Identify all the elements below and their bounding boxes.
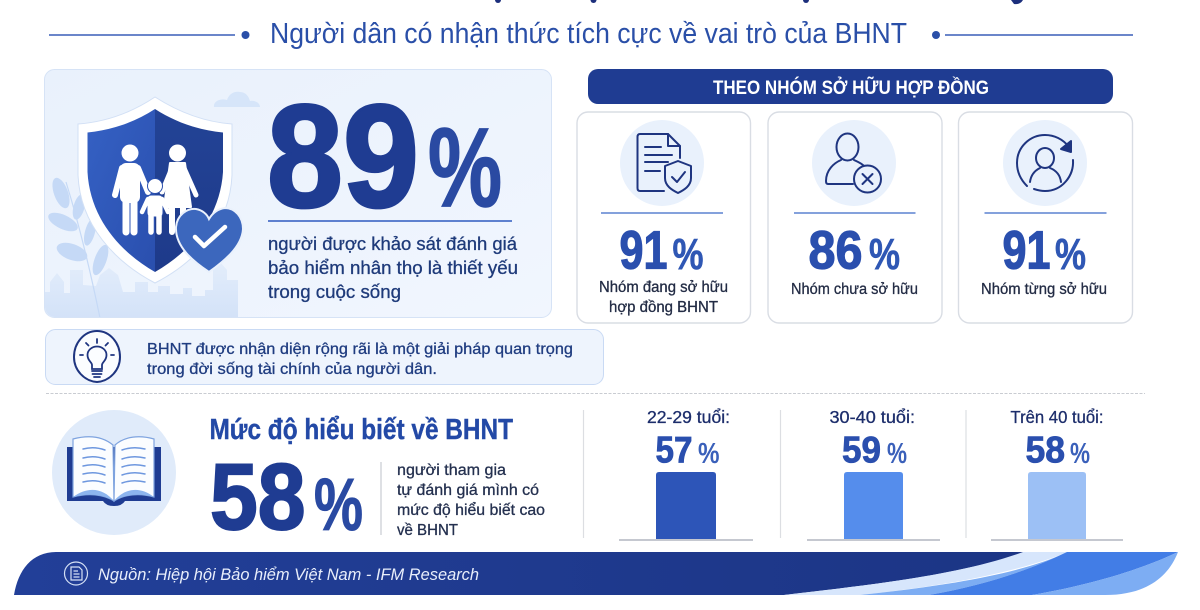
card: former owners: 91 bbox=[1002, 220, 1050, 280]
big number 89%: % bbox=[428, 105, 502, 230]
header pill: THEO NHÓM SỞ HỮU HỢP ĐỒNG bbox=[713, 75, 989, 99]
bar: over 40 bbox=[991, 407, 1123, 540]
description: bảo hiểm nhân thọ là thiết yếu bbox=[268, 258, 518, 278]
icon: source document bbox=[64, 562, 88, 585]
big number 89%: 89 bbox=[267, 74, 419, 238]
callout: BHNT: BHNT được nhận diện rộng rãi là một giải pháp quan trọng bbox=[147, 341, 573, 358]
bar: 22-29 bbox=[619, 407, 753, 540]
big number 58%: 58 bbox=[210, 444, 306, 549]
card: current owners: % bbox=[672, 230, 704, 279]
description bbox=[268, 234, 518, 302]
card: non-owners bbox=[768, 112, 942, 323]
clipped title descenders bbox=[495, 0, 1023, 4]
bar: 22-29: 57 bbox=[656, 430, 692, 470]
card: non-owners: % bbox=[869, 230, 900, 279]
bar: 30-40: 59 bbox=[842, 430, 881, 470]
card: former owners bbox=[958, 112, 1132, 323]
big number 89% bbox=[267, 74, 502, 238]
description: trong cuộc sống bbox=[268, 282, 401, 302]
city skyline bbox=[45, 262, 238, 318]
bar: over 40: % bbox=[1070, 438, 1090, 470]
card: current owners: Nhóm đang sở hữu bbox=[599, 279, 728, 296]
bar: 30-40: 30-40 tuổi: bbox=[830, 407, 915, 427]
big number 58% bbox=[210, 444, 363, 549]
heading: awareness: Mức độ hiểu biết về BHNT bbox=[210, 414, 514, 446]
icon: document with shield bbox=[638, 134, 691, 193]
bar: 22-29: 22-29 tuổi: bbox=[647, 407, 730, 427]
family figures bbox=[115, 144, 196, 232]
header pill bbox=[588, 69, 1113, 104]
awareness description: mức độ hiểu biết cao bbox=[397, 502, 545, 519]
bar: 30-40 bbox=[807, 407, 940, 540]
icon: person in rotating arrow bbox=[1017, 135, 1073, 191]
card: current owners bbox=[577, 112, 750, 323]
cloud bbox=[214, 92, 260, 107]
subtitle: Người dân có nhận thức tích cực về vai trò của BHNT bbox=[270, 18, 907, 50]
card: non-owners: Nhóm chưa sở hữu bbox=[791, 281, 918, 298]
plant bbox=[48, 178, 108, 317]
card: non-owners: 86 bbox=[808, 220, 862, 280]
card: current owners: 91 bbox=[620, 220, 668, 280]
panel: 89 percent bbox=[44, 70, 552, 318]
callout: BHNT bbox=[46, 330, 604, 384]
card: current owners: hợp đồng BHNT bbox=[609, 299, 719, 316]
source text: Nguồn: Hiệp hội Bảo hiểm Việt Nam - IFM Research bbox=[98, 565, 479, 584]
bar: over 40: Trên 40 tuổi: bbox=[1010, 407, 1104, 427]
card: former owners: % bbox=[1055, 230, 1086, 279]
icon: open book bbox=[52, 410, 176, 535]
awareness description: tự đánh giá mình có bbox=[397, 482, 539, 499]
bar: over 40: 58 bbox=[1026, 430, 1065, 470]
icon: person with x bbox=[826, 134, 881, 192]
card: former owners: Nhóm từng sở hữu bbox=[981, 281, 1107, 298]
icon: shield with family and heart bbox=[78, 97, 243, 283]
heart with check bbox=[176, 208, 243, 272]
big number 58%: % bbox=[314, 463, 363, 546]
bar: 30-40: % bbox=[887, 438, 907, 470]
subtitle bbox=[49, 18, 1133, 50]
footer band bbox=[14, 552, 1178, 595]
description: người được khảo sát đánh giá bbox=[268, 234, 518, 254]
awareness description: người tham gia bbox=[397, 462, 506, 479]
bar: 22-29: % bbox=[698, 438, 720, 470]
callout: BHNT: trong đời sống tài chính của người dân. bbox=[147, 361, 437, 378]
awareness description bbox=[397, 462, 545, 539]
icon: light bulb bbox=[74, 331, 120, 382]
awareness description: về BHNT bbox=[397, 522, 459, 539]
